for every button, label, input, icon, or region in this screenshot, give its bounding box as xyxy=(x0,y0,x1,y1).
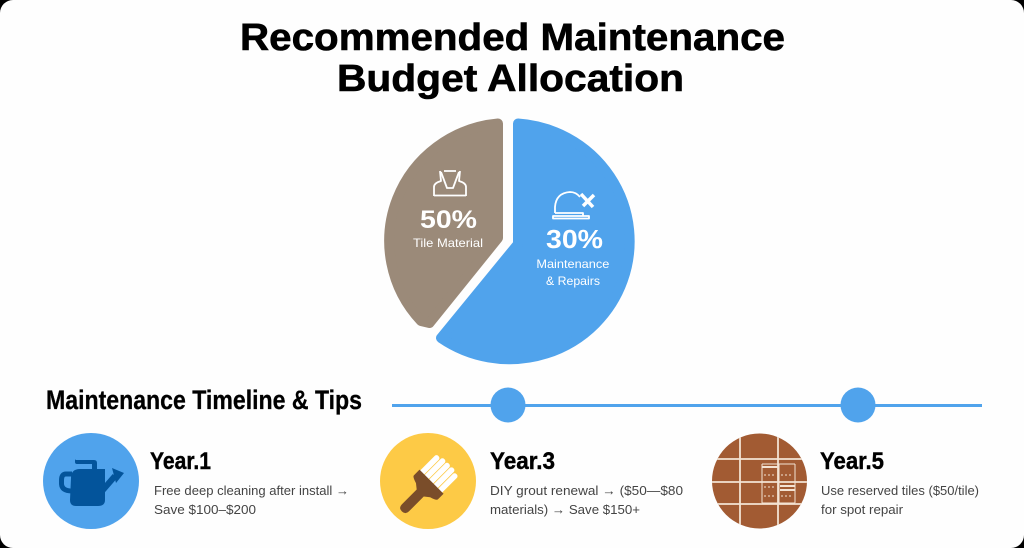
title: Budget Allocation xyxy=(337,58,684,100)
year 1 item xyxy=(43,433,353,529)
heading: maintenance timeline: Maintenance Timeline & Tips xyxy=(46,385,362,415)
pie slice: maintenance and repairs xyxy=(441,124,630,359)
icon: maintenance helmet xyxy=(553,192,594,218)
year label: Year.3 xyxy=(490,448,555,475)
year 5 item xyxy=(710,430,983,532)
description: Save $100–$200 xyxy=(154,502,256,517)
description: Free deep cleaning after install → xyxy=(154,483,349,498)
icon: tile material xyxy=(434,171,466,196)
pie chart xyxy=(389,124,630,359)
description: for spot repair xyxy=(821,502,904,517)
description: Use reserved tiles ($50/tile) xyxy=(821,483,979,498)
description: DIY grout renewal → ($50—$80 xyxy=(490,483,683,498)
icon: watering can xyxy=(43,433,139,529)
title xyxy=(240,17,785,100)
label: 50%: 50% xyxy=(420,206,477,234)
icon: paint brush xyxy=(380,433,476,529)
pie slice: tile material xyxy=(389,124,498,323)
icon: tile grid xyxy=(712,434,807,528)
year label: Year.5 xyxy=(820,448,884,475)
label: maintenance and repairs: & Repairs xyxy=(546,274,600,288)
timeline line with markers xyxy=(392,388,982,422)
label: 30%: 30% xyxy=(546,224,603,254)
label: maintenance and repairs: Maintenance xyxy=(536,257,610,271)
title: Recommended Maintenance xyxy=(240,17,785,59)
year 3 item xyxy=(380,433,687,529)
description: materials) → Save $150+ xyxy=(490,502,640,517)
year label: Year.1 xyxy=(150,448,211,475)
label: tile material: Tile Material xyxy=(413,236,483,250)
